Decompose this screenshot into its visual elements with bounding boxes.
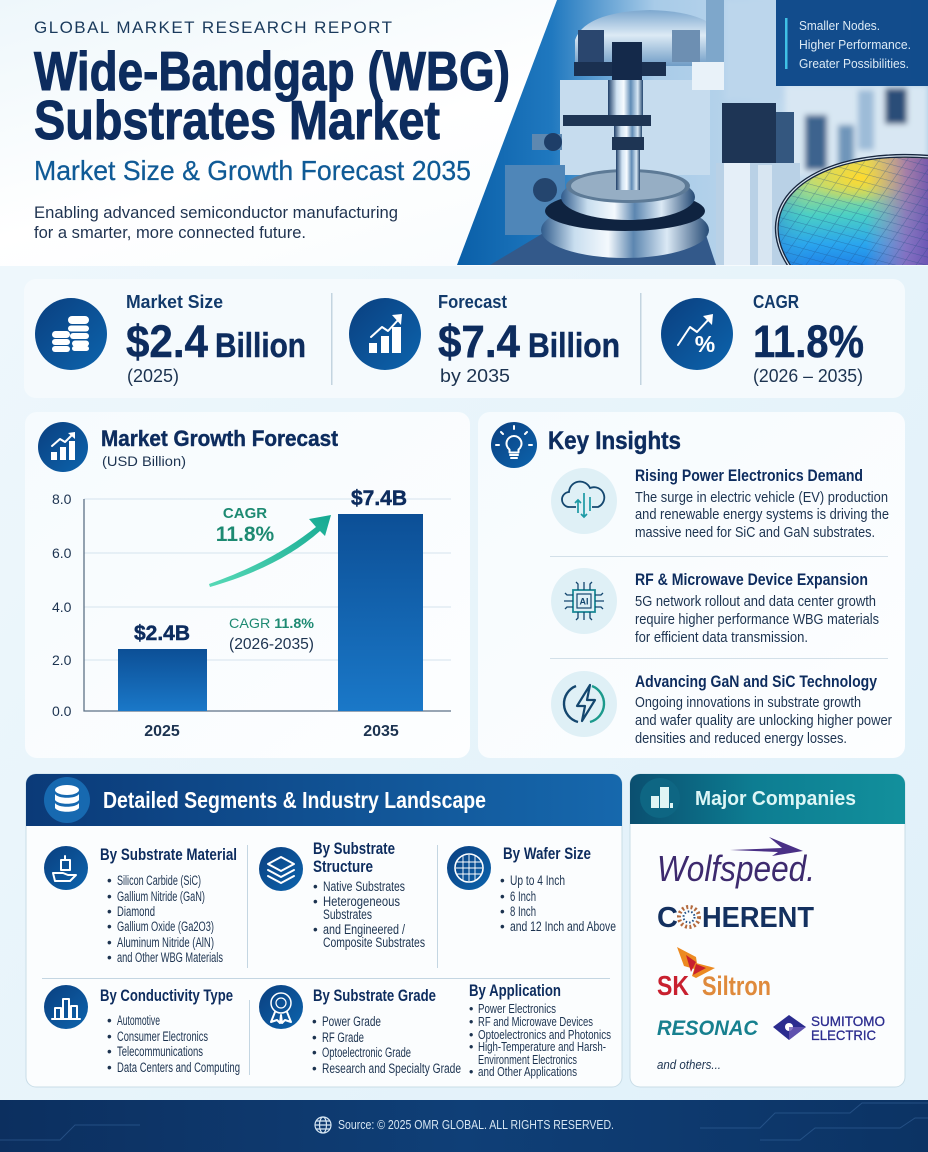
segment: by conductivity type: •	[107, 1060, 112, 1075]
icon: light bulb	[491, 422, 537, 468]
header banner	[0, 0, 928, 266]
bar chart: $2.4B	[134, 622, 190, 645]
segment: by application: •	[469, 1028, 473, 1042]
segment: by conductivity type: By Conductivity Type	[100, 986, 233, 1005]
segment: by substrate grade: RF Grade	[322, 1030, 364, 1045]
segment: by wafer size: 8 Inch	[510, 904, 536, 919]
stat: market size: Market Size	[126, 292, 223, 312]
stat: forecast: $7.4	[438, 316, 520, 367]
segment: by substrate material: Aluminum Nitride (AlN)	[117, 935, 214, 950]
segment: by wafer size: •	[500, 873, 505, 888]
logo: Coherent: HERENT	[702, 902, 814, 934]
segment: by wafer size: •	[500, 904, 505, 919]
tagline callout	[776, 0, 928, 86]
segment: by wafer size: and 12 Inch and Above	[510, 919, 616, 934]
segment: by substrate structure: Substrates	[323, 907, 372, 922]
title: Substrates Market	[34, 89, 440, 151]
bar chart	[52, 487, 451, 740]
intro text: Enabling advanced semiconductor manufacturing	[34, 203, 398, 222]
bar chart: 6.0	[52, 545, 72, 561]
companies header	[630, 774, 905, 824]
title	[34, 40, 510, 151]
subtitle: Market Size & Growth Forecast 2035	[34, 155, 471, 186]
segment: by substrate material: •	[107, 919, 112, 934]
segment: by conductivity type: Automotive	[117, 1013, 160, 1028]
segment: by substrate structure	[259, 839, 425, 950]
bar chart: CAGR 11.8%	[229, 615, 315, 631]
segment: by substrate material: Gallium Oxide (Ga2O3)	[117, 919, 214, 934]
segment: by substrate structure: Native Substrates	[323, 879, 405, 894]
stat: forecast: Billion	[528, 327, 620, 365]
insight: rising power electronics demand: Rising Power Electronics Demand	[635, 466, 863, 485]
segment: by wafer size	[447, 844, 616, 934]
bar chart: 8.0	[52, 491, 72, 507]
segment: by substrate grade: •	[312, 1061, 317, 1076]
intro text: for a smarter, more connected future.	[34, 223, 306, 242]
segment: by conductivity type: •	[107, 1044, 112, 1059]
segment: by wafer size: •	[500, 919, 505, 934]
insight: rising power electronics demand	[551, 466, 889, 541]
intro text	[34, 203, 398, 242]
bar chart: 2035	[363, 723, 399, 740]
stat: forecast: Forecast	[438, 292, 507, 312]
insight: rising power electronics demand: The surge in electric vehicle (EV) production	[635, 489, 888, 506]
insight: advancing GaN and SiC technology: and wafer quality are unlocking higher power	[635, 712, 892, 729]
key figures panel	[24, 279, 905, 398]
segment: by application: Power Electronics	[478, 1002, 556, 1016]
bar chart: 2.0	[52, 652, 72, 668]
insight: advancing GaN and SiC technology: densities and reduced energy losses.	[635, 730, 847, 747]
segment: by substrate structure: •	[313, 894, 318, 909]
stat: market size: $2.4	[126, 316, 208, 367]
logo: Coherent: C	[657, 902, 678, 934]
footer	[0, 1100, 928, 1152]
arrow: CAGR growth	[209, 515, 331, 587]
bar chart: 0.0	[52, 703, 72, 719]
segment: by substrate structure: •	[313, 922, 318, 937]
insight: RF and microwave device expansion: 5G network rollout and data center growth	[635, 593, 876, 610]
segment: by substrate grade: Research and Specialty Grade	[322, 1061, 461, 1076]
bar chart: 4.0	[52, 599, 72, 615]
segment: by application: •	[469, 1002, 473, 1016]
panel: key insights	[478, 412, 905, 758]
segment: by application: •	[469, 1065, 473, 1079]
insight: rising power electronics demand: massive need for SiC and GaN substrates.	[635, 524, 875, 541]
segment: by substrate structure: and Engineered /	[323, 922, 405, 937]
segment: by substrate structure: Structure	[313, 857, 373, 876]
segment: by substrate grade: Optoelectronic Grade	[322, 1045, 411, 1060]
segments header	[26, 774, 622, 826]
icon: growth chart	[38, 422, 88, 472]
others note: and others...	[657, 1057, 721, 1072]
tagline callout: Higher Performance.	[799, 38, 911, 52]
insight: RF and microwave device expansion: require higher performance WBG materials	[635, 611, 879, 628]
segment: by substrate material: •	[107, 950, 112, 965]
eyebrow: global market research report: GLOBAL MARKET RESEARCH REPORT	[34, 18, 392, 37]
insight: advancing GaN and SiC technology	[551, 671, 892, 747]
segment: by substrate material: Silicon Carbide (SiC)	[117, 873, 201, 888]
bar chart: 11.8%	[216, 523, 275, 546]
bar chart: (2026-2035)	[229, 636, 314, 653]
segment: by application: Environment Electronics	[478, 1053, 577, 1067]
segment: by conductivity type: •	[107, 1029, 112, 1044]
segments header: Detailed Segments & Industry Landscape	[103, 787, 486, 813]
logo: Sumitomo Electric: SUMITOMO	[811, 1013, 885, 1029]
segment: by application: High-Temperature and Harsh-	[478, 1040, 606, 1054]
segment: by substrate material: •	[107, 904, 112, 919]
stat: forecast	[349, 292, 620, 386]
panel: major companies	[630, 774, 905, 1087]
hero image: wafer processing machine	[457, 0, 928, 265]
chart heading	[101, 426, 339, 469]
title: Wide-Bandgap (WBG)	[34, 40, 510, 102]
companies header: Major Companies	[695, 788, 856, 810]
segment: by wafer size: By Wafer Size	[503, 844, 591, 863]
segment: by substrate material: •	[107, 935, 112, 950]
segment: by substrate material: Gallium Nitride (GaN)	[117, 889, 205, 904]
insight: advancing GaN and SiC technology: Ongoing innovations in substrate growth	[635, 694, 861, 711]
insight: RF and microwave device expansion	[551, 568, 879, 646]
stat: market size: (2025)	[127, 366, 179, 386]
icon: globe	[315, 1117, 331, 1133]
panel: detailed segments	[26, 774, 622, 1087]
segment: by substrate grade: Power Grade	[322, 1014, 381, 1029]
bar chart: $7.4B	[351, 487, 407, 510]
segment: by application: RF and Microwave Devices	[478, 1015, 593, 1029]
segment: by conductivity type: Telecommunications	[117, 1044, 203, 1059]
segment: by application: By Application	[469, 981, 561, 1000]
segment: by substrate material: •	[107, 873, 112, 888]
segment: by application: Optoelectronics and Photonics	[478, 1028, 611, 1042]
segment: by substrate grade: •	[312, 1030, 317, 1045]
heading: Key Insights	[548, 427, 681, 455]
segment: by application: •	[469, 1015, 473, 1029]
segment: by conductivity type: •	[107, 1013, 112, 1028]
segment: by substrate grade: •	[312, 1014, 317, 1029]
segment: by conductivity type: Consumer Electronics	[117, 1029, 208, 1044]
segment: by substrate structure: Composite Substrates	[323, 935, 425, 950]
segment: by substrate structure: •	[313, 879, 318, 894]
segment: by substrate grade: •	[312, 1045, 317, 1060]
segment: by substrate structure: Heterogeneous	[323, 894, 400, 909]
stat: market size	[35, 292, 306, 386]
logo: SK Siltron: SK	[657, 970, 689, 1001]
segment: by wafer size: Up to 4 Inch	[510, 873, 565, 888]
tagline callout: Greater Possibilities.	[799, 57, 909, 71]
insight: advancing GaN and SiC technology: Advancing GaN and SiC Technology	[635, 672, 877, 691]
tagline callout: Smaller Nodes.	[799, 19, 880, 33]
logo: Resonac: RESONAC	[657, 1017, 759, 1040]
insight: rising power electronics demand: and renewable energy systems is driving the	[635, 506, 889, 523]
logo: Sumitomo Electric	[773, 1013, 885, 1043]
chart heading: Market Growth Forecast	[101, 426, 339, 451]
source text: Source: © 2025 OMR GLOBAL. ALL RIGHTS RESERVED.	[338, 1118, 614, 1132]
segment: by wafer size: •	[500, 889, 505, 904]
segment: by substrate material: •	[107, 889, 112, 904]
logo: SK Siltron: Siltron	[702, 971, 771, 1001]
segment: by application: •	[469, 1040, 473, 1054]
logo: Coherent	[657, 902, 814, 934]
bar chart: CAGR	[223, 505, 267, 522]
segment: by substrate material: By Substrate Material	[100, 845, 237, 864]
stat: CAGR: CAGR	[753, 292, 799, 312]
segment: by conductivity type: Data Centers and Computing	[117, 1060, 240, 1075]
stat: CAGR: (2026 – 2035)	[753, 366, 863, 386]
stat: market size: Billion	[215, 327, 306, 365]
bar chart: 2025	[144, 723, 180, 740]
insight: RF and microwave device expansion: RF & Microwave Device Expansion	[635, 570, 868, 589]
segment: by substrate structure: By Substrate	[313, 839, 395, 858]
chart heading: (USD Billion)	[102, 453, 186, 469]
insight: RF and microwave device expansion: for efficient data transmission.	[635, 629, 808, 646]
segment: by conductivity type	[44, 985, 240, 1075]
segment: by substrate material: Diamond	[117, 904, 155, 919]
stat: forecast: by 2035	[440, 366, 510, 386]
segment: by substrate material	[44, 845, 237, 965]
segment: by substrate grade: By Substrate Grade	[313, 986, 436, 1005]
logo: Wolfspeed: Wolfspeed.	[657, 848, 815, 889]
segment: by substrate grade	[259, 985, 461, 1076]
segment: by wafer size: 6 Inch	[510, 889, 536, 904]
segment: by application	[469, 981, 611, 1079]
segment: by substrate material: and Other WBG Materials	[117, 950, 223, 965]
panel: market growth forecast	[25, 412, 470, 758]
stat: CAGR: %	[695, 331, 715, 357]
segment: by application: and Other Applications	[478, 1065, 577, 1079]
stat: CAGR	[661, 292, 864, 386]
stat: CAGR: 11.8%	[753, 316, 864, 367]
insight: RF and microwave device expansion: AI	[580, 596, 588, 606]
logo: SK Siltron	[657, 947, 771, 1001]
logo: Sumitomo Electric: ELECTRIC	[811, 1027, 876, 1043]
